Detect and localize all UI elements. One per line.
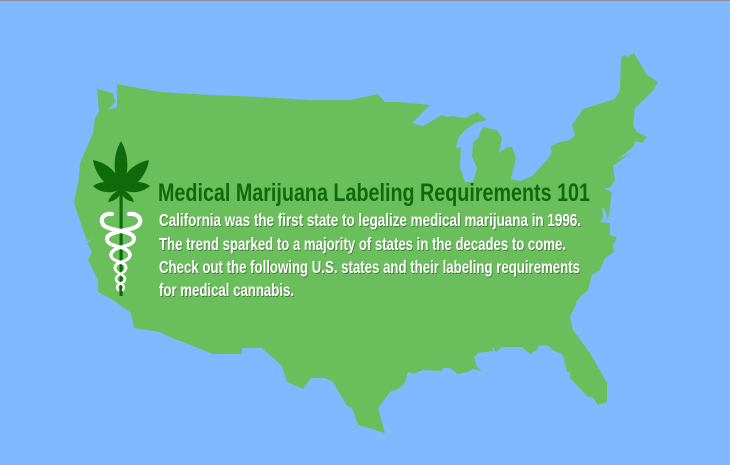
icon: entwined serpents <box>102 214 140 290</box>
text block: introduction: The trend sparked to a majority of states in the decades to come. <box>159 234 566 254</box>
title: Medical Marijuana Labeling Requirements 101 <box>158 179 590 207</box>
icon: cannabis leaf and caduceus <box>93 141 150 296</box>
text block: introduction: California was the first state to legalize medical marijuana in 1996. <box>159 210 581 230</box>
map: contiguous United States <box>74 53 658 433</box>
icon: staff <box>120 188 123 296</box>
text block: introduction: for medical cannabis. <box>159 280 294 300</box>
text block: introduction <box>159 210 581 300</box>
icon: cannabis leaf <box>93 141 150 202</box>
text block: introduction: Check out the following U.S. states and their labeling requirements <box>159 257 580 277</box>
